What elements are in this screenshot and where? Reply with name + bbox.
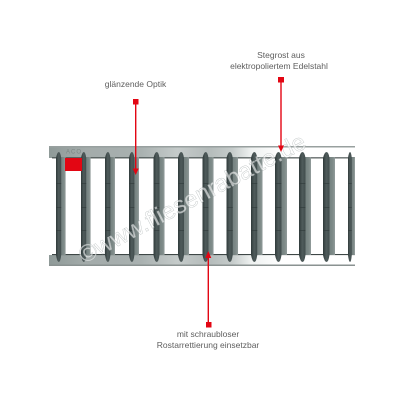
bars (56, 152, 355, 262)
label: Rostarretierung: mit schraubloser (177, 329, 239, 339)
callout arrow: Rostarretierung (205, 251, 212, 328)
red marker block (65, 158, 82, 171)
callout arrow: glänzende Optik (133, 99, 139, 175)
top frame band (49, 146, 355, 158)
bottom frame band (49, 255, 355, 266)
label: Stegrost: Stegrost aus (257, 50, 305, 60)
watermark: ©www.fliesenrabatte.de (74, 128, 311, 269)
callout arrow: Stegrost (278, 77, 284, 152)
ACO logo: ACO (66, 150, 82, 156)
label: Rostarretierung: Rostarrettierung einsetzbar (157, 340, 259, 350)
label: glänzende Optik: glänzende Optik (105, 79, 167, 89)
grate (49, 146, 355, 266)
label: Stegrost: elektropoliertem Edelstahl (230, 61, 328, 71)
